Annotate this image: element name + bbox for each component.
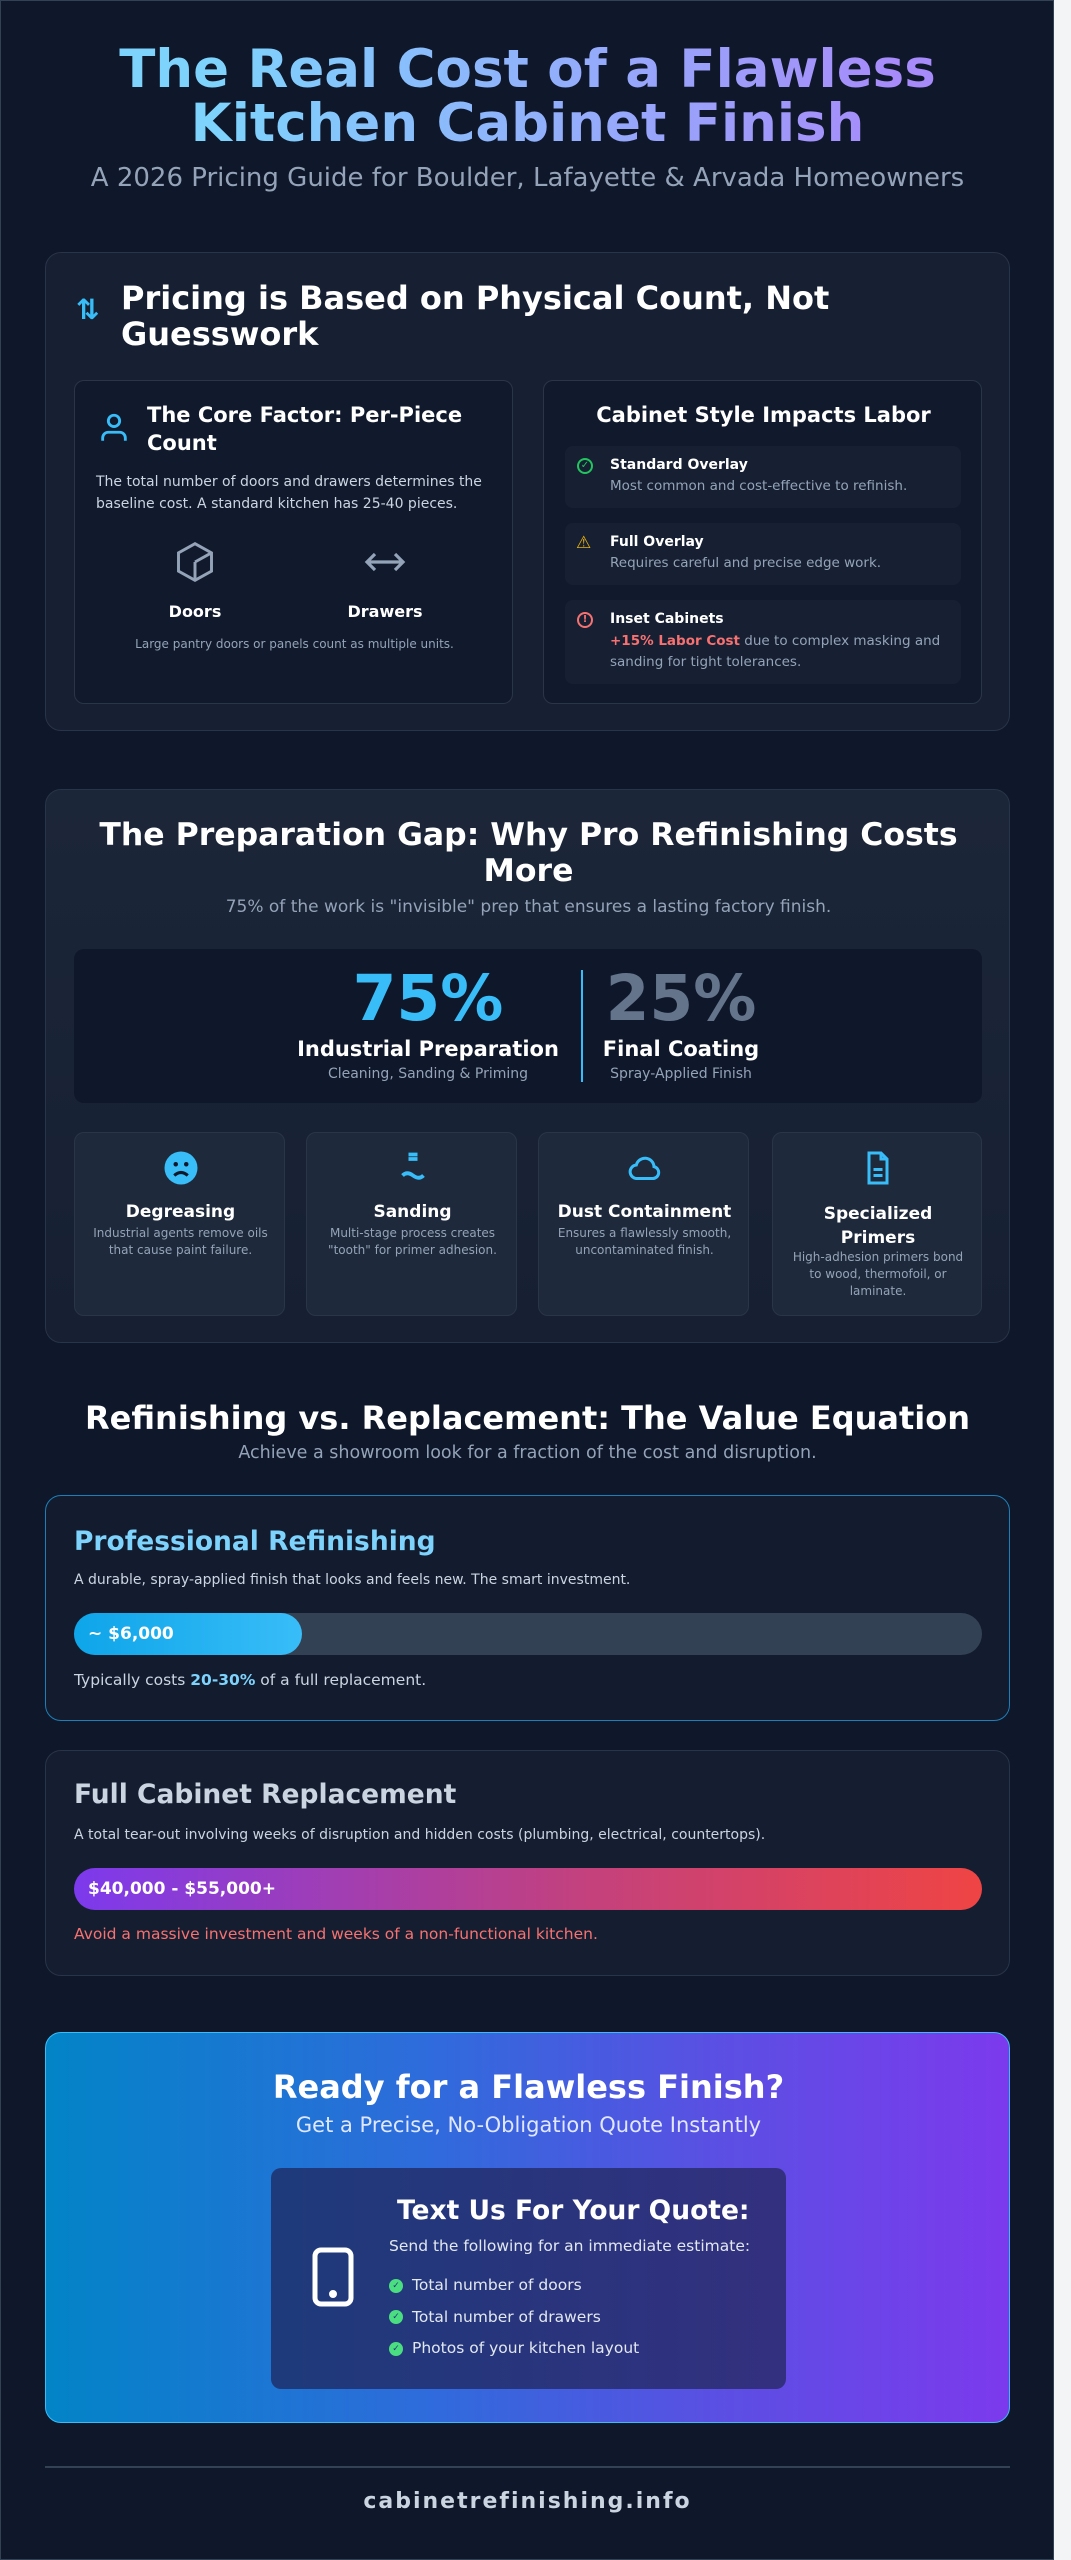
card: primers: Primers <box>841 1228 915 1248</box>
card: full replacement: Full Cabinet Replacement <box>74 1779 456 1810</box>
stat: 75%: Industrial Preparation <box>297 1037 559 1061</box>
heading: pricing: Pricing is Based on Physical Count, Not Guesswork <box>121 279 829 353</box>
card: primers <box>772 1132 982 1316</box>
item: full overlay: Requires careful and precise edge work. <box>610 555 881 571</box>
panel: preparation gap <box>45 789 1010 1343</box>
card: full replacement: Avoid a massive investment and weeks of a non-functional kitchen. <box>74 1925 598 1943</box>
item: full overlay <box>565 523 961 585</box>
card: primers: Specialized <box>824 1204 932 1224</box>
stat: 25%: 25% <box>606 962 756 1035</box>
card: professional refinishing: Typically costs 20-30% of a full replacement. <box>74 1671 426 1689</box>
card: full replacement: A total tear-out involving weeks of disruption and hidden costs (plumbing, electrical, countertops). <box>74 1827 765 1843</box>
card: professional refinishing <box>45 1495 1010 1721</box>
item: full overlay: ⚠ <box>576 533 591 553</box>
title: The Real Cost of a Flawless <box>119 39 936 100</box>
item: inset cabinets: +15% Labor Cost due to complex masking and sanding for tight tolerances. <box>610 633 940 670</box>
item: standard overlay: Most common and cost-effective to refinish. <box>610 478 907 494</box>
icon: document <box>868 1152 888 1184</box>
card: cabinet style <box>543 380 982 704</box>
icon: sort: ⇅ <box>76 293 99 326</box>
item: standard overlay: ✓ <box>581 460 589 471</box>
panel: call to action: Ready for a Flawless Finish? <box>273 2068 784 2106</box>
footnote: Large pantry doors or panels count as multiple units. <box>135 637 454 651</box>
bar: replacement cost: $40,000 - $55,000+ <box>88 1879 276 1899</box>
subheading: value: Achieve a showroom look for a fraction of the cost and disruption. <box>238 1443 817 1463</box>
card: sanding: Sanding <box>373 1202 452 1222</box>
icon: sanding <box>401 1152 425 1180</box>
heading: value equation: Refinishing vs. Replacement: The Value Equation <box>85 1399 970 1437</box>
card: degreasing: Degreasing <box>126 1202 235 1222</box>
title: Kitchen Cabinet Finish <box>191 93 864 154</box>
bar: refinishing cost: ~ $6,000 <box>88 1624 174 1644</box>
bar: refinishing cost <box>74 1613 982 1655</box>
card: dust containment: Ensures a flawlessly smooth, uncontaminated finish. <box>558 1226 731 1257</box>
card: professional refinishing: A durable, spray-applied finish that looks and feels new. The smart investment. <box>74 1572 630 1588</box>
card: sanding <box>306 1132 517 1316</box>
heading: The Preparation Gap: Why Pro Refinishing Costs More <box>99 817 958 889</box>
checklist: ✓ <box>392 2312 400 2322</box>
icon: user <box>101 414 127 441</box>
card: professional refinishing: Professional Refinishing <box>74 1526 436 1557</box>
icon: drawers <box>347 552 422 621</box>
checklist: Photos of your kitchen layout <box>412 2339 639 2357</box>
stat box <box>74 949 982 1103</box>
checklist <box>389 2276 639 2357</box>
stat: 25% <box>603 962 759 1082</box>
item: standard overlay: Standard Overlay <box>610 457 748 473</box>
item: full overlay: Full Overlay <box>610 534 704 550</box>
card: degreasing <box>74 1132 285 1316</box>
stat: 75%: Cleaning, Sanding & Priming <box>328 1066 528 1082</box>
icon: phone <box>312 2248 354 2306</box>
panel: pricing <box>45 252 1010 731</box>
icon: cloud <box>628 1156 660 1180</box>
stat: 75% <box>297 962 559 1082</box>
checklist: ✓ <box>392 2344 400 2354</box>
bar: replacement cost <box>74 1868 982 1910</box>
box: text us <box>271 2168 786 2389</box>
panel: call to action <box>45 2032 1010 2423</box>
title <box>1 43 1054 151</box>
icon: doors: Doors <box>169 602 221 621</box>
subheading: 75% of the work is "invisible" prep that ensures a lasting factory finish. <box>226 897 831 917</box>
subtitle: A 2026 Pricing Guide for Boulder, Lafayette & Arvada Homeowners <box>91 163 964 193</box>
card title: The Core Factor: Per-Piece Count <box>147 403 462 455</box>
checklist: ✓ <box>392 2280 400 2290</box>
stat: 25%: Spray-Applied Finish <box>610 1066 752 1082</box>
item: standard overlay <box>565 446 961 508</box>
card text: The total number of doors and drawers determines the baseline cost. A standard kitchen has 25-40 pieces. <box>96 474 482 512</box>
stat: 25%: Final Coating <box>603 1037 759 1061</box>
panel: call to action: Get a Precise, No-Obligation Quote Instantly <box>296 2113 761 2137</box>
card: core factor <box>74 380 513 704</box>
item: inset cabinets <box>565 600 961 684</box>
card: sanding: Multi-stage process creates "tooth" for primer adhesion. <box>328 1226 497 1257</box>
card title: Cabinet Style Impacts Labor <box>596 403 931 427</box>
card: dust containment: Dust Containment <box>558 1202 731 1222</box>
card: primers: High-adhesion primers bond to wood, thermofoil, or laminate. <box>793 1250 963 1298</box>
icon: drawers: Drawers <box>347 602 422 621</box>
card: degreasing: Industrial agents remove oils that cause paint failure. <box>93 1226 268 1257</box>
checklist: Total number of doors <box>412 2276 582 2294</box>
box: text us: Text Us For Your Quote: <box>397 2195 750 2226</box>
card: dust containment <box>538 1132 749 1316</box>
icon: doors <box>169 542 221 621</box>
box: text us: Send the following for an immediate estimate: <box>389 2237 750 2255</box>
item: inset cabinets: Inset Cabinets <box>610 611 724 627</box>
item: inset cabinets: ! <box>583 614 587 625</box>
card: full replacement <box>45 1750 1010 1976</box>
checklist: Total number of drawers <box>412 2308 601 2326</box>
footer: cabinetrefinishing.info <box>363 2489 692 2514</box>
stat: 75%: 75% <box>353 962 503 1035</box>
icon: sad face <box>164 1152 198 1184</box>
